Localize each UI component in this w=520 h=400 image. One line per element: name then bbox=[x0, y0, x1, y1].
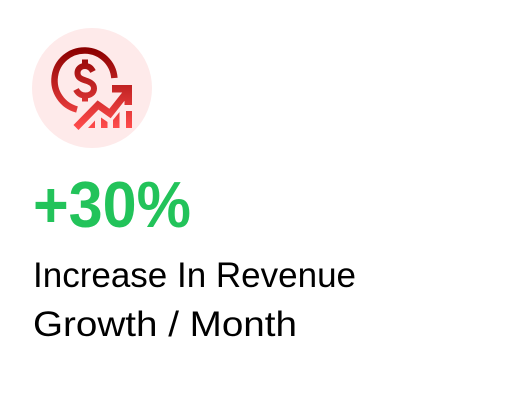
icon: coin ring bbox=[55, 50, 114, 110]
icon background circle bbox=[32, 28, 152, 148]
icon: dollar sign bbox=[76, 60, 94, 102]
description line 2: Growth / Month bbox=[33, 305, 297, 344]
headline figure: +30% bbox=[33, 168, 191, 241]
description text bbox=[33, 256, 356, 344]
icon: rising arrow bbox=[76, 85, 132, 128]
description line 1: Increase In Revenue bbox=[33, 256, 356, 295]
icon: revenue growth badge bbox=[32, 28, 152, 148]
icon: bars bbox=[88, 111, 132, 128]
